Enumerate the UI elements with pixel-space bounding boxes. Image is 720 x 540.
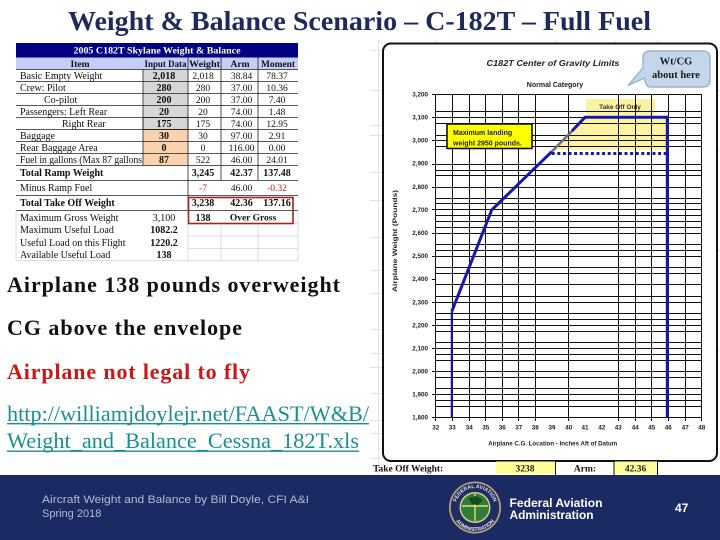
table weight arm moment values: 137.48 <box>263 168 291 179</box>
table input data values: 1082.2 <box>150 225 178 236</box>
table weight arm moment values: 38.84 <box>231 72 252 82</box>
table item labels: Maximum Useful Load <box>20 225 114 236</box>
table weight arm moment values: 522 <box>196 156 210 166</box>
table weight arm moment values: 138 <box>196 213 210 224</box>
x axis labels: 48 <box>698 424 706 432</box>
y axis labels: 3,000 <box>412 138 428 145</box>
agency name: Administration <box>510 508 594 522</box>
page number: 47 <box>675 501 689 515</box>
footer bar <box>0 475 720 540</box>
landing weight callout: weight 2950 pounds. <box>452 140 522 148</box>
panel: center of gravity chart <box>373 44 717 475</box>
cg envelope line <box>452 117 667 418</box>
table weight arm moment values: 3,245 <box>192 168 214 179</box>
y axis labels: 2,300 <box>412 299 428 306</box>
table item labels: Rear Baggage Area <box>20 143 98 154</box>
table weight arm moment values: 74.00 <box>231 108 252 118</box>
x axis labels: 46 <box>665 424 672 432</box>
agency name: Federal Aviation <box>510 496 602 510</box>
table weight arm moment values: 74.00 <box>231 120 252 130</box>
x axis labels: 39 <box>548 424 556 432</box>
table weight arm moment values: 46.00 <box>231 156 252 166</box>
link text: http://williamjdoylejr.net/FAAST/W&B/ <box>7 401 370 426</box>
table weight arm moment values: 2,018 <box>192 72 214 82</box>
table weight arm moment values: 0 <box>201 144 206 154</box>
table weight arm moment values: 42.37 <box>230 168 253 179</box>
table input data values <box>150 71 178 261</box>
input data cell shading <box>143 70 188 166</box>
table input data values: 175 <box>156 119 172 130</box>
table column headers: Moment <box>261 60 296 70</box>
x axis labels: 32 <box>432 424 440 432</box>
chart title: C182T Center of Gravity Limits <box>486 58 620 68</box>
wt cg speech bubble <box>628 51 710 87</box>
table item labels: Crew: Pilot <box>20 83 66 94</box>
footer course text <box>42 494 309 520</box>
y axis labels: 2,200 <box>412 322 428 329</box>
landing weight callout: Maximum landing <box>453 130 512 137</box>
table weight arm moment values: 7.40 <box>269 96 286 106</box>
table item labels <box>20 71 142 261</box>
table column headers: Weight <box>189 60 221 70</box>
table weight arm moment values: 0.00 <box>269 144 286 154</box>
y axis labels: 1,800 <box>412 415 428 422</box>
text: airplane overweight: Airplane 138 pounds overweight <box>7 272 341 297</box>
take off only label: Take Off Only <box>599 104 641 111</box>
table item labels: Basic Empty Weight <box>20 71 103 82</box>
icon: faa seal: FEDERAL AVIATION <box>453 484 497 502</box>
table weight arm moment values: 137.16 <box>263 198 291 209</box>
y axis labels <box>412 92 428 422</box>
table weight arm moment values: 37.00 <box>231 96 252 106</box>
table input data values: 20 <box>159 107 169 118</box>
table weight arm moment values: 20 <box>198 108 208 118</box>
table item labels: Co-pilot <box>44 95 78 106</box>
table item labels: Available Useful Load <box>20 250 110 261</box>
y axis labels: 2,600 <box>412 230 428 237</box>
table input data values: 138 <box>156 250 172 261</box>
table weight arm moment values: Over Gross <box>230 214 276 224</box>
chart frame <box>383 44 717 461</box>
x axis labels: 45 <box>648 424 656 432</box>
table input data values: 280 <box>156 83 172 94</box>
take off weight summary row: 3238 <box>516 464 535 474</box>
take off weight summary row: Take Off Weight: <box>373 464 443 474</box>
table weight arm moment values: 10.36 <box>266 84 288 94</box>
footer course text: Aircraft Weight and Balance by Bill Doyle, CFI A&I <box>42 494 309 506</box>
y axis title: Airplane Weight (Pounds) <box>392 190 399 292</box>
y axis labels: 2,500 <box>412 253 428 260</box>
y axis labels: 1,900 <box>412 392 428 399</box>
y axis labels: 2,000 <box>412 369 428 376</box>
table item labels: Fuel in gallons (Max 87 gallons <box>20 155 142 166</box>
table weight arm moment values: 3,238 <box>192 198 214 209</box>
x axis labels: 33 <box>449 424 456 432</box>
link text: Weight_and_Balance_Cessna_182T.xls <box>7 428 359 453</box>
table item labels: Minus Ramp Fuel <box>20 183 92 194</box>
table weight arm moment values: 97.00 <box>231 132 252 142</box>
table weight arm moment values: 2.91 <box>269 132 286 142</box>
x axis labels <box>432 424 706 432</box>
take off weight summary row: Arm: <box>574 464 596 474</box>
table weight arm moment values: 12.95 <box>266 120 288 130</box>
table weight arm moment values: 175 <box>196 120 210 130</box>
table item labels: Right Rear <box>62 119 106 130</box>
take off weight summary row <box>373 462 658 475</box>
x axis labels: 42 <box>598 424 606 432</box>
landing weight callout <box>447 124 532 148</box>
table weight arm moment values: 37.00 <box>231 84 252 94</box>
table item labels: Maximum Gross Weight <box>20 213 119 224</box>
wt cg speech bubble: about here <box>652 70 700 81</box>
wt cg speech bubble: Wt/CG <box>660 56 692 68</box>
table column headers: Arm <box>230 60 250 70</box>
text: cg above envelope: CG above the envelope <box>7 315 242 340</box>
table column headers: Input Data <box>144 60 187 70</box>
table input data values: 0 <box>162 143 166 154</box>
x axis labels: 36 <box>499 424 506 432</box>
table input data values: 1220.2 <box>150 238 178 249</box>
y axis labels: 2,700 <box>412 207 428 214</box>
x axis labels: 38 <box>532 424 539 432</box>
x axis labels: 37 <box>515 424 523 432</box>
table weight arm moment values: 30 <box>198 132 208 142</box>
table weight arm moment values: 42.36 <box>230 198 253 209</box>
table column headers: Item <box>70 60 90 70</box>
table weight arm moment values: 116.00 <box>229 144 255 154</box>
red highlight box <box>188 198 293 224</box>
take off weight summary row: 42.36 <box>625 464 646 474</box>
x axis labels: 35 <box>482 424 490 432</box>
link text <box>7 401 370 453</box>
x axis labels: 47 <box>682 424 689 432</box>
table input data values: 2,018 <box>153 71 175 82</box>
table weight arm moment values: -7 <box>199 184 207 194</box>
table weight arm moment values: 24.01 <box>266 156 288 166</box>
table item labels: Total Take Off Weight <box>20 198 115 209</box>
x axis labels: 44 <box>632 424 639 432</box>
table column headers <box>16 58 298 70</box>
x axis labels: 34 <box>466 424 473 432</box>
table weight arm moment values: 200 <box>196 96 210 106</box>
panel: weight and balance spreadsheet <box>16 43 298 261</box>
icon: faa seal: ADMINISTRATION <box>456 519 494 531</box>
table input data values: 200 <box>156 95 172 106</box>
y axis labels: 2,900 <box>412 161 428 168</box>
table item labels: Passengers: Left Rear <box>20 107 108 118</box>
y axis labels: 2,100 <box>412 346 428 352</box>
table input data values: 3,100 <box>153 213 175 224</box>
table weight arm moment values: 280 <box>196 84 210 94</box>
x axis labels: 41 <box>581 424 589 432</box>
table weight arm moment values: 78.37 <box>266 72 288 82</box>
table title bar: 2005 C182T Skylane Weight & Balance <box>74 46 240 56</box>
x axis labels: 43 <box>615 424 622 432</box>
text: not legal to fly: Airplane not legal to fly <box>7 359 250 384</box>
table grid <box>16 58 298 261</box>
chart subtitle: Normal Category <box>527 82 583 89</box>
table weight arm moment values: -0.32 <box>267 184 287 194</box>
table title bar <box>16 43 298 58</box>
x axis title: Airplane C.G. Location - Inches Aft of Datum <box>488 440 617 448</box>
footer course text: Spring 2018 <box>42 508 101 520</box>
table weight arm moment values: 1.48 <box>269 108 286 118</box>
table weight arm moment values: 46.00 <box>231 184 252 194</box>
table item labels: Useful Load on this Flight <box>20 238 126 249</box>
title: Weight & Balance Scenario – C-182T – Full Fuel <box>68 6 652 36</box>
take off only region <box>552 99 667 150</box>
y axis labels: 2,800 <box>412 184 428 191</box>
icon: faa seal <box>449 482 501 534</box>
x axis labels: 40 <box>565 424 573 432</box>
y axis labels: 3,200 <box>412 92 428 98</box>
y axis labels: 3,100 <box>412 114 428 122</box>
y axis labels: 2,400 <box>412 276 428 283</box>
table input data values: 30 <box>159 131 169 142</box>
table weight arm moment values <box>192 72 291 224</box>
table item labels: Total Ramp Weight <box>20 168 104 179</box>
table item labels: Baggage <box>20 131 56 142</box>
table input data values: 87 <box>159 155 169 166</box>
agency name <box>510 496 602 522</box>
